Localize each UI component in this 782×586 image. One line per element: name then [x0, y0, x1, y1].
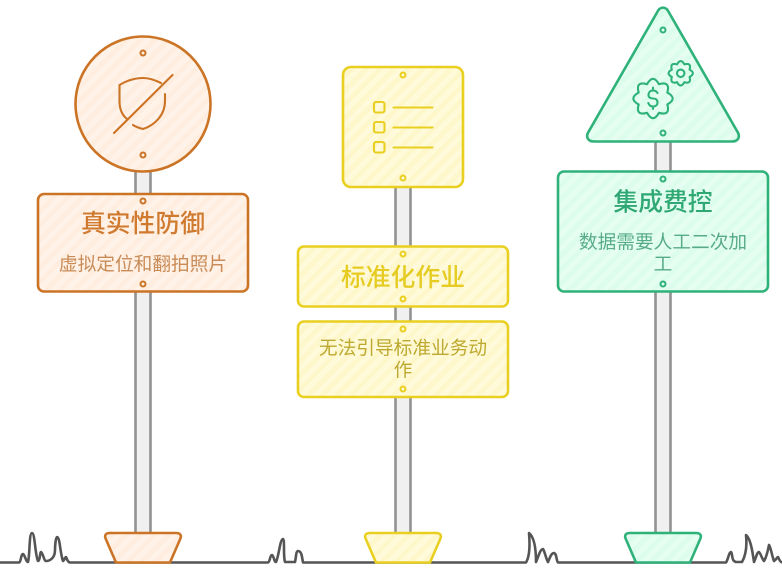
base: yellow: [365, 533, 441, 562]
panel: yellow description sign: [298, 322, 508, 397]
heading: authenticity: 真实性防御: [81, 210, 205, 238]
heading: standardized work: 标准化作业: [341, 264, 465, 292]
panel: yellow heading sign: [298, 246, 508, 306]
panel: green triangular sign with gears icon: [587, 8, 739, 142]
text: standardized work description: 作: [394, 360, 412, 380]
post: yellow sign post: [396, 180, 410, 535]
base: orange: [105, 533, 181, 562]
base: green: [625, 533, 701, 562]
text: authenticity description: 虚拟定位和翻拍照片: [59, 254, 227, 274]
post: orange sign post: [136, 165, 150, 535]
panel: green text sign: [558, 172, 768, 292]
text: cost control description: 工: [654, 254, 672, 274]
panel: orange text sign: [38, 194, 248, 292]
text: cost control description: 数据需要人工二次加: [579, 232, 747, 252]
ground line with grass: [0, 533, 782, 562]
heading: integrated cost control: 集成费控: [613, 188, 713, 216]
icon: crossed-out shield: [114, 75, 172, 133]
post: green sign post: [656, 135, 670, 535]
panel: yellow square sign with checklist icon: [343, 67, 463, 187]
icon: checklist: [374, 102, 432, 152]
icon: dollar gears: [633, 61, 693, 118]
panel: orange circular sign with shield icon: [76, 36, 210, 172]
text: standardized work description: 无法引导标准业务动: [319, 338, 487, 358]
